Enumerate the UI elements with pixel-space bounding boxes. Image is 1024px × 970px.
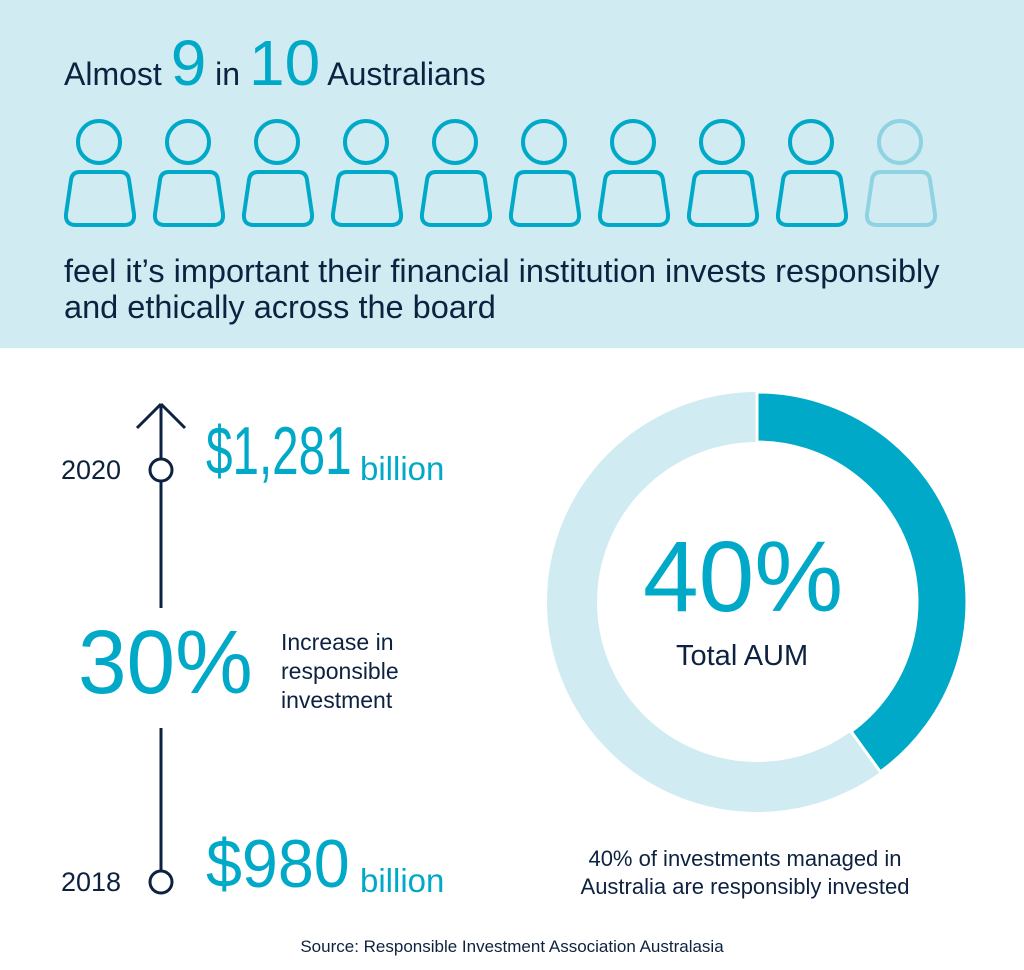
text: description: and ethically across the board bbox=[64, 289, 496, 325]
increase text: Increase in bbox=[281, 629, 394, 655]
label 2020: 2020 bbox=[61, 455, 121, 485]
unit 2018: billion bbox=[360, 862, 444, 899]
timeline arrow bbox=[136, 403, 186, 894]
heading: Almost 9 in 10 Australians bbox=[64, 27, 486, 99]
increase text: responsible bbox=[281, 658, 399, 684]
top panel bbox=[0, 0, 1024, 348]
40%: 40% bbox=[643, 521, 843, 633]
text: description: feel it’s important their financial institution invests responsibly bbox=[64, 253, 940, 289]
total AUM: Total AUM bbox=[676, 640, 808, 672]
increase text: investment bbox=[281, 687, 392, 713]
unit 2020: billion bbox=[360, 450, 444, 487]
value 2020: $1,281 bbox=[206, 413, 352, 489]
label 2018: 2018 bbox=[61, 867, 121, 897]
text: description bbox=[64, 253, 940, 325]
icons: people bbox=[64, 119, 938, 227]
source: Source: Responsible Investment Association Australasia bbox=[300, 937, 724, 956]
30%: 30% bbox=[78, 613, 253, 713]
donut caption: 40% of investments managed in Australia are responsibly invested bbox=[581, 846, 909, 899]
donut chart bbox=[547, 392, 966, 812]
increase text bbox=[281, 629, 399, 713]
value 2018: $980 bbox=[206, 826, 350, 902]
